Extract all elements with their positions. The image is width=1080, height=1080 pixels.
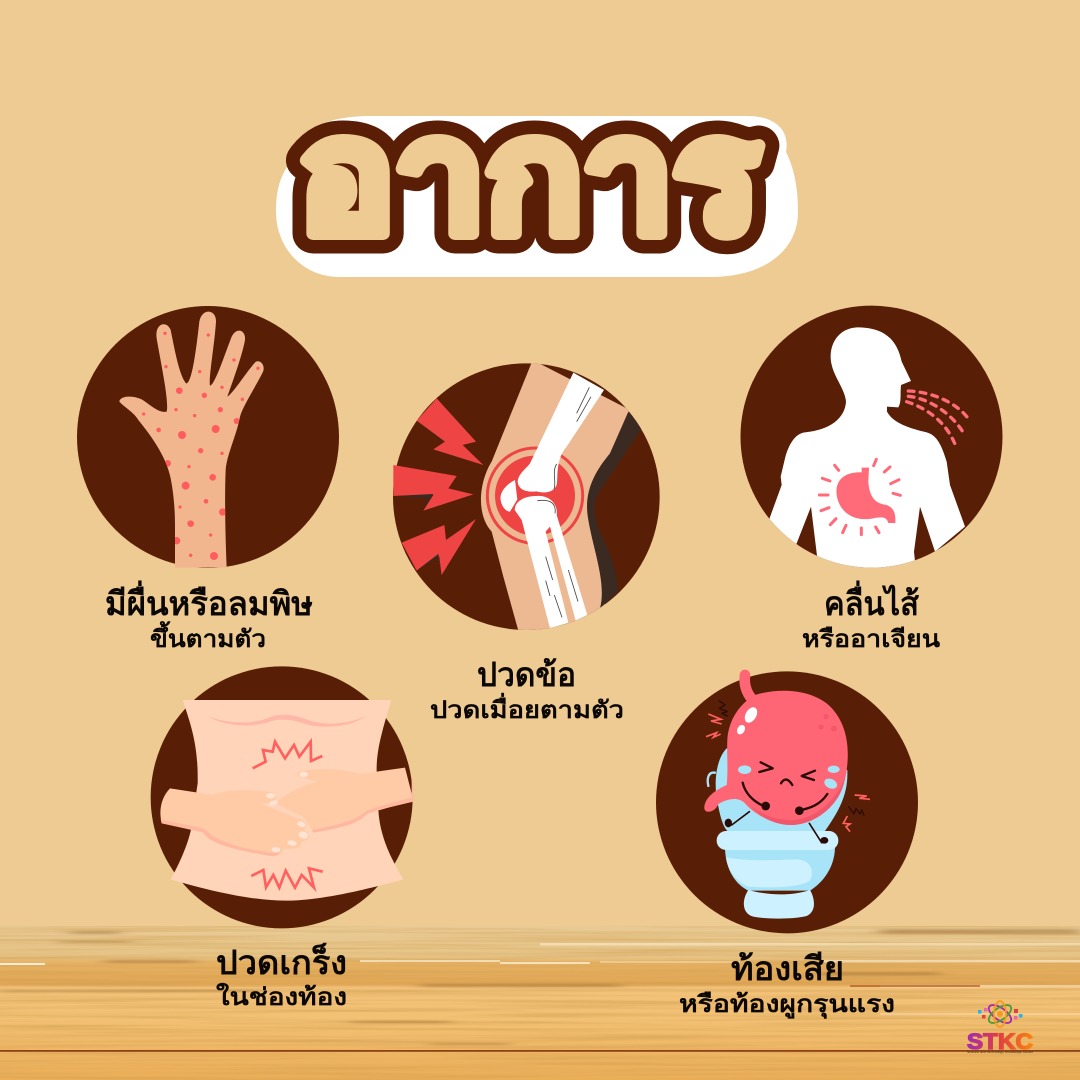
rash label: ขึ้นตามตัว — [150, 620, 266, 653]
icon: crying stomach on toilet — [656, 671, 918, 933]
icon: knee joint with lightning — [393, 360, 660, 637]
cramps label: ในช่องท้อง — [216, 982, 347, 1011]
icon: abdomen with hands — [151, 666, 414, 928]
logo: STKC — [967, 1001, 1033, 1054]
nausea label: หรืออาเจียน — [802, 626, 941, 653]
panel: joint pain — [393, 360, 660, 724]
diarrhea label: ท้องเสีย — [731, 950, 844, 987]
icon: body silhouette with stomach — [740, 306, 1002, 572]
rash label: มีผื่นหรือลมพิษ — [105, 580, 313, 622]
cramps label: ปวดเกร็ง — [216, 942, 347, 981]
title outline: อาการ — [298, 90, 760, 265]
logo caption: Science and Technology Knowledge Center — [967, 1050, 1033, 1054]
panel: diarrhea — [656, 671, 918, 1020]
panel: cramps — [151, 666, 414, 1011]
title: อาการ — [276, 90, 798, 277]
cramps label — [216, 942, 347, 1011]
title white backing — [276, 116, 798, 277]
icon: hand with red spots — [119, 312, 264, 568]
joint pain label — [430, 656, 624, 724]
panel: rash — [77, 306, 339, 653]
nausea label — [802, 580, 941, 653]
joint pain label: ปวดข้อ — [477, 656, 576, 693]
rash circle — [77, 306, 339, 568]
nausea label: คลื่นไส้ — [824, 580, 920, 622]
diarrhea label: หรือท้องผูกรุนแรง — [679, 991, 895, 1020]
logo wordmark: STKC — [967, 1029, 1033, 1054]
rash label — [105, 580, 313, 653]
panel: nausea — [740, 306, 1002, 653]
title lettering: อาการ — [298, 90, 760, 265]
wooden table — [0, 926, 1080, 1080]
diarrhea label — [679, 950, 895, 1020]
icon: atom — [978, 1001, 1022, 1027]
joint pain label: ปวดเมื่อยตามตัว — [430, 692, 624, 724]
